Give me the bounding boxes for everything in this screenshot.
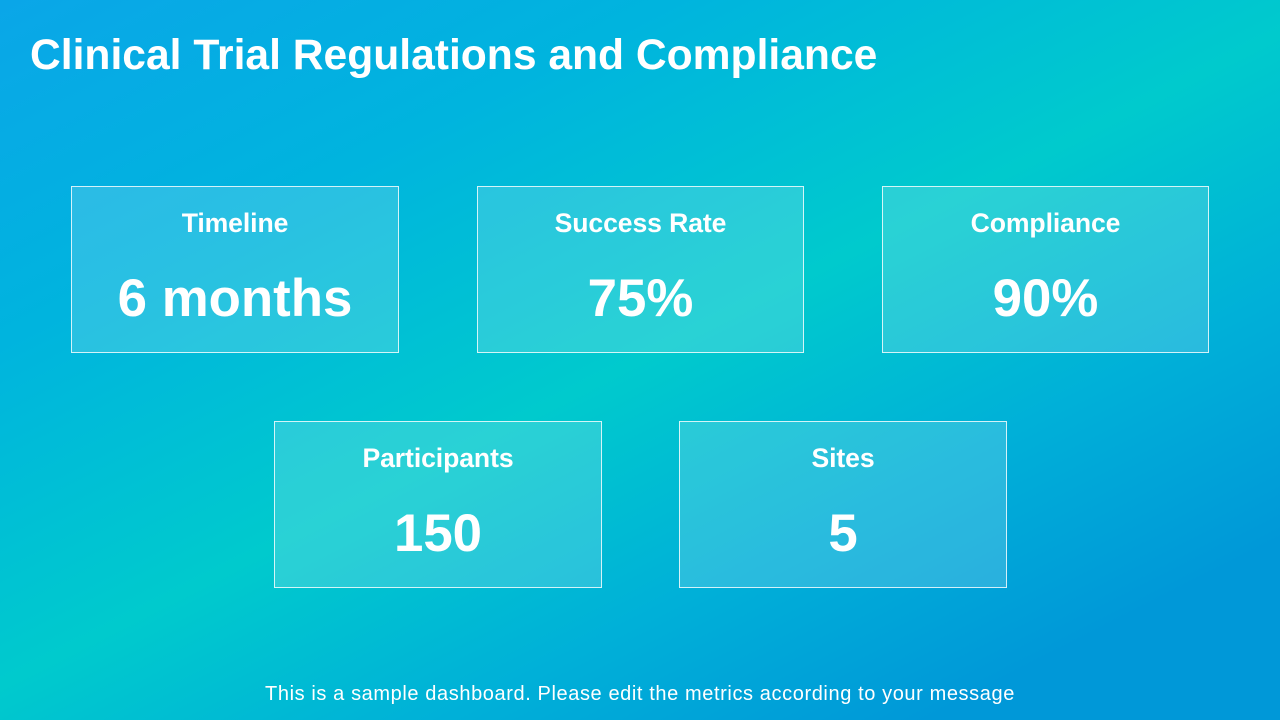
sites label: Sites: [811, 443, 875, 473]
participants value: 150: [394, 504, 482, 563]
success rate label: Success Rate: [555, 208, 726, 238]
title: Clinical Trial Regulations and Compliance: [30, 31, 877, 79]
panel: participants: [274, 421, 602, 588]
sites value: 5: [828, 504, 858, 563]
success rate value: 75%: [588, 269, 693, 328]
timeline value: 6 months: [118, 269, 352, 328]
compliance value: 90%: [993, 269, 1098, 328]
participants label: Participants: [362, 443, 514, 473]
panel: timeline: [71, 186, 399, 353]
timeline label: Timeline: [182, 208, 288, 238]
footer note: This is a sample dashboard. Please edit the metrics according to your message: [265, 683, 1015, 705]
compliance label: Compliance: [971, 208, 1120, 238]
panel: compliance: [882, 186, 1209, 353]
panel: success rate: [477, 186, 804, 353]
panel: sites: [679, 421, 1007, 588]
